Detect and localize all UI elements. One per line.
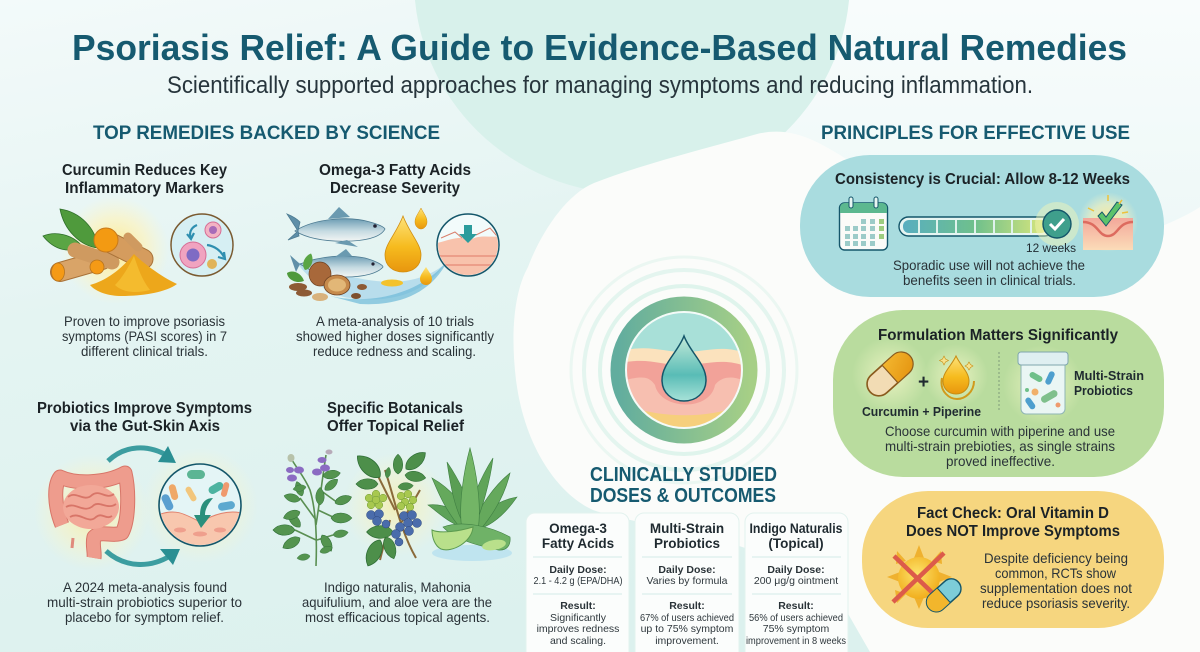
card: omega-3 doses: improves redness: [537, 623, 619, 635]
card: indigo doses: improvement in 8 weeks: [746, 635, 846, 647]
omega-3 body text: [296, 313, 494, 359]
formulation body text: [885, 423, 1115, 469]
heading: principles: PRINCIPLES FOR EFFECTIVE USE: [821, 122, 1130, 144]
title: Psoriasis Relief: A Guide to Evidence-Based Natural Remedies: [72, 27, 1127, 68]
progress bar: 12 weeks: [899, 202, 1079, 246]
consistency body text: [893, 257, 1085, 288]
card: probiotics doses: 67% of users achieved: [640, 612, 734, 624]
card: probiotics doses: improvement.: [655, 635, 719, 647]
fact check body text: Despite deficiency being: [984, 550, 1128, 566]
subtitle: Scientifically supported approaches for managing symptoms and reducing inflammation.: [167, 72, 1033, 99]
icon: fish, nuts and oil drops: [285, 207, 500, 304]
heading: clinically studied doses: [590, 464, 777, 507]
panel: formulation: [833, 310, 1164, 477]
icon: water drop: [662, 336, 706, 401]
curcumin body text: symptoms (PASI scores) in 7: [62, 328, 227, 344]
icon: turmeric root and powder: [43, 196, 233, 304]
curcumin heading: [62, 162, 227, 197]
omega-3 heading: Decrease Severity: [330, 180, 460, 197]
card: probiotics doses: Varies by formula: [647, 575, 728, 587]
botanicals heading: Specific Botanicals: [327, 400, 463, 417]
card: indigo doses: Daily Dose:: [767, 564, 825, 576]
label: multi-strain probiotics: [1074, 368, 1144, 398]
heading: top remedies: TOP REMEDIES BACKED BY SCIENCE: [93, 122, 440, 144]
panel: curcumin: [43, 162, 233, 359]
card: probiotics doses: up to 75% symptom: [641, 623, 734, 635]
fish one: [287, 207, 385, 247]
icon: mahonia plant: [352, 448, 429, 569]
icon: skin cross-section with down arrow: [437, 214, 500, 280]
curcumin body text: different clinical trials.: [81, 343, 208, 359]
fact check body text: supplementation does not: [980, 580, 1132, 596]
panel: consistency: [800, 155, 1164, 297]
icon: indigo plant: [273, 450, 353, 566]
botanicals body text: aquifulium, and aloe vera are the: [302, 594, 492, 610]
card: probiotics doses: Daily Dose:: [658, 564, 716, 576]
omega-3 heading: Omega-3 Fatty Acids: [319, 162, 471, 179]
icon: healed skin with check: [1080, 194, 1136, 250]
omega-3 body text: showed higher doses significantly: [296, 328, 494, 344]
formulation body text: multi-strain prebioties, as single strains: [885, 438, 1115, 454]
label: multi-strain probiotics: Multi-Strain: [1074, 368, 1144, 383]
card: omega-3 doses: Significantly: [550, 612, 607, 624]
card: omega-3 doses: Omega-3: [549, 521, 607, 536]
omega-3 body text: A meta-analysis of 10 trials: [316, 313, 474, 329]
probiotics heading: via the Gut-Skin Axis: [70, 418, 220, 435]
probiotics heading: [37, 400, 252, 435]
probiotics body text: [47, 579, 242, 625]
botanicals heading: Offer Topical Relief: [327, 418, 465, 435]
icon: piperine drop: [940, 356, 974, 399]
fact check body text: [980, 550, 1132, 611]
omega-3 heading: [319, 162, 471, 197]
panel: botanicals: [273, 400, 517, 625]
fact check heading: Does NOT Improve Symptoms: [906, 523, 1120, 540]
panel: omega-3: [285, 162, 500, 359]
icon: gut to skin axis: [44, 445, 246, 567]
omega-3 body text: reduce redness and scaling.: [313, 343, 476, 359]
botanicals body text: most efficacious topical agents.: [305, 609, 490, 625]
formulation body text: proved ineffective.: [946, 453, 1055, 469]
arrow: gut to skin top: [108, 446, 176, 463]
icon: capsule: [862, 347, 918, 401]
panel: probiotics: [34, 400, 258, 625]
card: probiotics doses: [635, 513, 739, 652]
probiotics heading: Probiotics Improve Symptoms: [37, 400, 252, 417]
card: indigo doses: Indigo Naturalis: [750, 521, 842, 536]
consistency heading: Consistency is Crucial: Allow 8-12 Weeks: [835, 171, 1130, 188]
consistency body text: benefits seen in clinical trials.: [903, 272, 1076, 288]
card: indigo doses: (Topical): [768, 536, 824, 551]
panel: vitamin d fact check: [862, 491, 1164, 628]
fact check heading: Fact Check: Oral Vitamin D: [917, 505, 1109, 522]
label: multi-strain probiotics: Probiotics: [1074, 383, 1133, 398]
icon: aloe vera: [428, 448, 517, 561]
card: indigo doses: 200 μg/g ointment: [754, 575, 838, 587]
card: omega-3 doses: Result:: [560, 600, 596, 612]
central skin emblem: [571, 257, 797, 483]
icon: botanical plants: [273, 448, 517, 569]
icon: inflammatory cells: [171, 214, 233, 276]
card: indigo doses: Result:: [778, 600, 814, 612]
botanicals body text: [302, 579, 492, 625]
card: omega-3 doses: 2.1 - 4.2 g (EPA/DHA): [534, 575, 622, 587]
card: omega-3 doses: [526, 513, 629, 652]
arrow: gut to skin bottom: [106, 549, 180, 565]
botanicals body text: Indigo naturalis, Mahonia: [324, 579, 471, 595]
icon: bacteria circle: [158, 464, 242, 550]
probiotics body text: placebo for symptom relief.: [65, 609, 224, 625]
card: indigo doses: 56% of users achieved: [749, 612, 843, 624]
heading: clinically studied doses: DOSES & OUTCOMES: [590, 485, 776, 507]
formulation heading: Formulation Matters Significantly: [878, 327, 1118, 344]
card: probiotics doses: Probiotics: [654, 536, 720, 551]
icon: plus sign: +: [918, 372, 929, 393]
card: indigo doses: 75% symptom: [763, 623, 830, 635]
card: indigo doses: [745, 513, 848, 652]
icon: probiotic jar: [1018, 352, 1068, 414]
icon: calendar: [840, 197, 888, 250]
icon: crossed out sun and capsule: [887, 545, 965, 616]
fact check body text: common, RCTs show: [995, 565, 1117, 581]
card: omega-3 doses: Fatty Acids: [542, 536, 614, 551]
icon: intestine: [56, 473, 128, 558]
heading: clinically studied doses: CLINICALLY STUDIED: [590, 464, 777, 486]
botanicals heading: [327, 400, 465, 435]
curcumin heading: Curcumin Reduces Key: [62, 162, 227, 179]
card: probiotics doses: Multi-Strain: [650, 521, 724, 536]
fact check body text: reduce psoriasis severity.: [982, 595, 1130, 611]
fish two: [290, 249, 383, 277]
card: probiotics doses: Result:: [669, 600, 705, 612]
card: omega-3 doses: and scaling.: [550, 635, 606, 647]
fact check heading: [906, 505, 1120, 540]
probiotics body text: A 2024 meta-analysis found: [63, 579, 227, 595]
formulation body text: Choose curcumin with piperine and use: [885, 423, 1115, 439]
curcumin heading: Inflammatory Markers: [65, 180, 224, 197]
consistency body text: Sporadic use will not achieve the: [893, 257, 1085, 273]
curcumin body text: Proven to improve psoriasis: [64, 313, 225, 329]
curcumin body text: [62, 313, 227, 359]
probiotics body text: multi-strain probiotics superior to: [47, 594, 242, 610]
label: 12 weeks: 12 weeks: [1026, 243, 1076, 255]
card: omega-3 doses: Daily Dose:: [549, 564, 607, 576]
label: curcumin + piperine: Curcumin + Piperine: [862, 404, 981, 419]
